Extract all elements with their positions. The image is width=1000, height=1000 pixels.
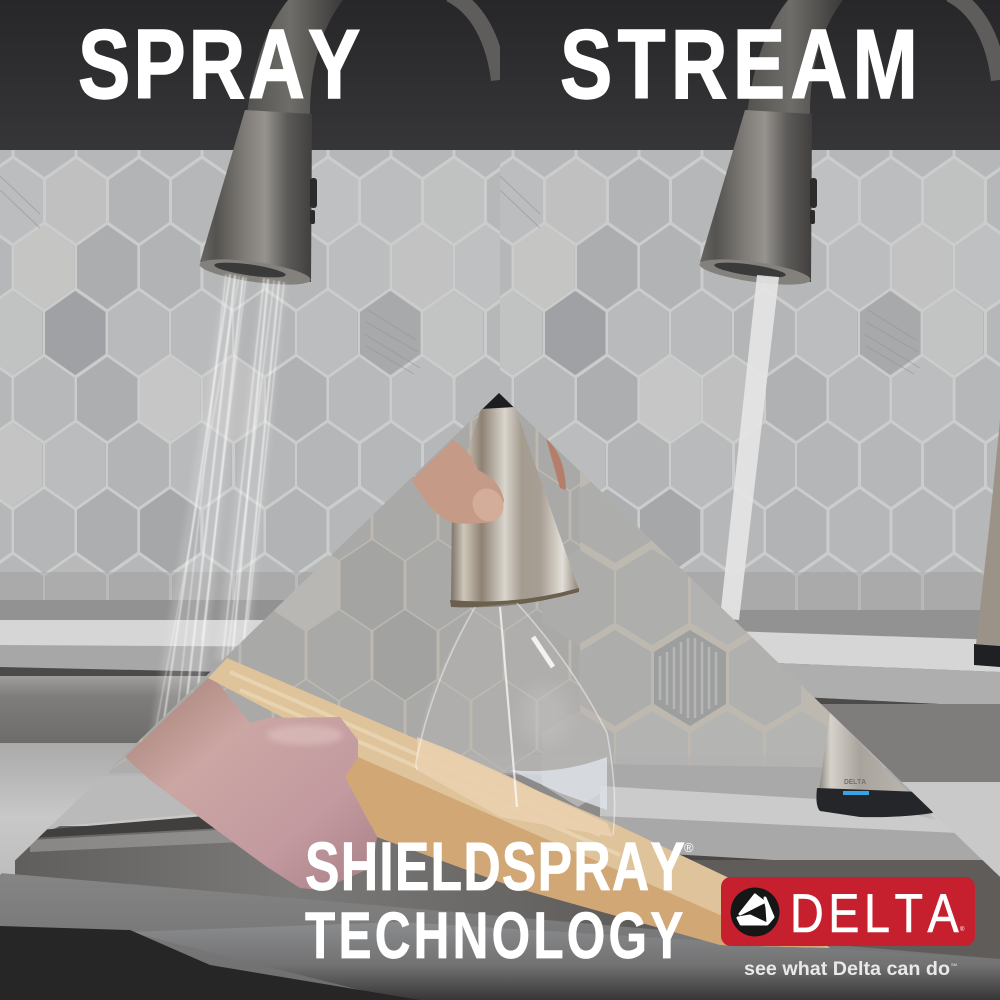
hand holding wood	[125, 678, 377, 890]
icon: delta mark	[730, 888, 780, 936]
heading: spray: SPRAY	[78, 10, 363, 119]
faucet head, stream	[698, 0, 999, 290]
tagline: see what Delta can do	[744, 959, 950, 980]
logo: delta: ®	[960, 926, 965, 933]
heading: stream: STREAM	[560, 10, 923, 119]
top dark cabinet band	[0, 0, 500, 150]
sprayer head	[412, 393, 579, 607]
counter and sink, photo	[0, 764, 1000, 1000]
water bell	[416, 603, 615, 837]
panel: stream	[482, 0, 1000, 882]
right faucet base	[974, 420, 1000, 667]
heading: shieldspray technology: TECHNOLOGY	[305, 899, 686, 973]
tagline: SM	[951, 962, 957, 967]
hand: fingers on sprayer	[412, 438, 566, 527]
logo: delta	[721, 877, 975, 946]
countertop	[0, 600, 371, 875]
heading: shieldspray technology: ®	[684, 840, 694, 855]
hexagon tile wall	[0, 150, 500, 600]
water stream	[720, 275, 779, 620]
water spray streams	[150, 274, 286, 729]
hexagon tile wall	[482, 150, 1000, 639]
hexagon tile wall	[106, 410, 892, 807]
heading: shieldspray technology: SHIELDSPRAY	[305, 828, 686, 905]
panel: shieldspray photo	[0, 393, 1000, 1000]
top dark cabinet band	[500, 0, 1000, 150]
panel: spray	[0, 0, 515, 878]
logo: delta: DELTA	[790, 882, 963, 944]
faucet base with blue light	[816, 712, 936, 820]
faucet head, spray	[198, 0, 499, 290]
wood plank	[208, 658, 830, 948]
countertop	[734, 610, 1000, 877]
heading: shieldspray technology	[305, 828, 694, 973]
faucet base with blue light: DELTA	[844, 779, 866, 786]
